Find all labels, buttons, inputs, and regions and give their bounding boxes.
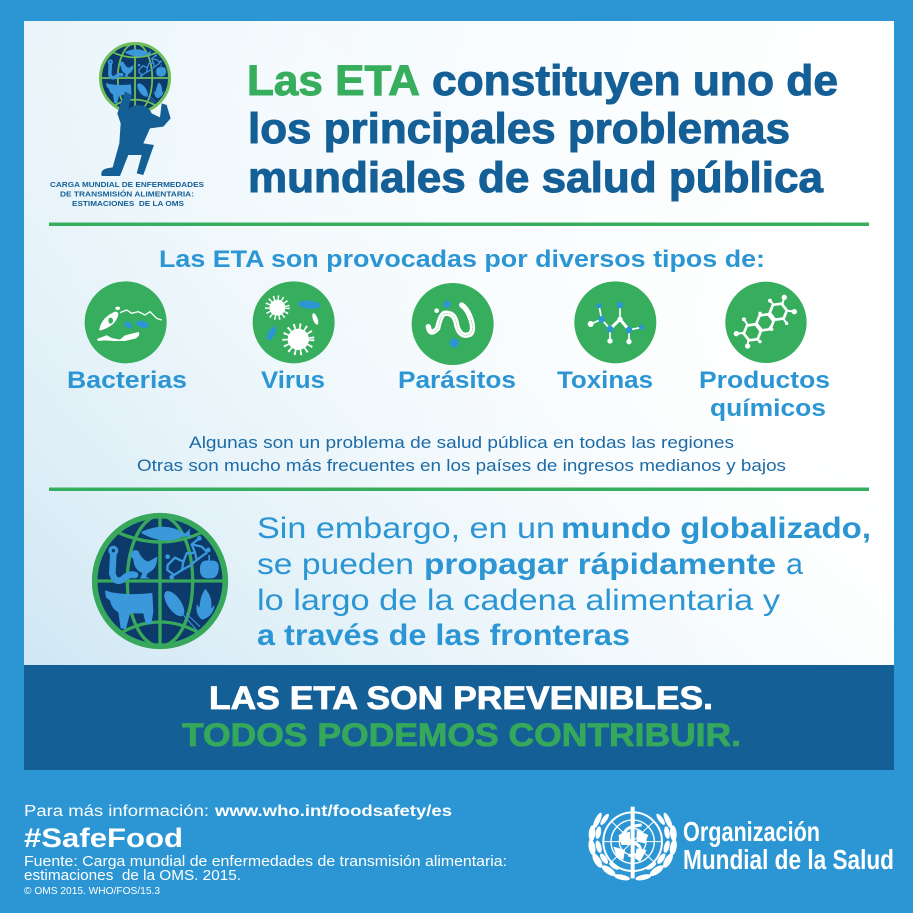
logo caption: CARGA MUNDIAL DE ENFERMEDADES bbox=[50, 180, 204, 189]
text block: globalized world: mundo globalizado, bbox=[561, 512, 871, 545]
logo text: Organizacion Mundial de la Salud: Organización bbox=[683, 816, 820, 847]
icon: productos quimicos bbox=[725, 282, 807, 363]
hashtag: #SafeFood bbox=[24, 823, 183, 853]
label: Productos quimicos: químicos bbox=[710, 395, 826, 422]
text block: globalized world bbox=[257, 512, 871, 652]
text block: globalized world: se pueden bbox=[257, 548, 414, 581]
text block: globalized world: a bbox=[786, 548, 803, 581]
text block: globalized world: lo largo de la cadena alimentaria y bbox=[257, 584, 780, 617]
text block: globalized world: a través de las fronteras bbox=[257, 619, 630, 652]
icon: toxinas bbox=[574, 281, 656, 363]
title: constituyen uno de bbox=[432, 58, 838, 105]
label: Virus: Virus bbox=[261, 367, 325, 394]
icon: virus bbox=[253, 281, 335, 363]
subheading: Las ETA son provocadas por diversos tipos de: bbox=[159, 246, 765, 273]
footer: more information: www.who.int/foodsafety/es bbox=[214, 803, 452, 820]
footer: more information: Para más información: bbox=[24, 803, 209, 820]
source note: © OMS 2015. WHO/FOS/15.3 bbox=[24, 885, 160, 897]
icon: parasitos bbox=[412, 283, 494, 365]
footer: more information bbox=[24, 803, 452, 820]
label: Parasitos: Parásitos bbox=[398, 367, 516, 394]
text block: globalized world: Sin embargo, en un bbox=[257, 512, 555, 545]
title: los principales problemas bbox=[248, 106, 790, 153]
logo caption: ESTIMACIONES DE LA OMS bbox=[72, 199, 184, 208]
text block: regions bbox=[137, 433, 786, 475]
source note: estimaciones de la OMS. 2015. bbox=[24, 868, 241, 884]
title: mundiales de salud pública bbox=[248, 155, 823, 202]
icon: bacterias bbox=[85, 281, 167, 363]
text block: regions: Algunas son un problema de salud pública en todas las regiones bbox=[189, 433, 734, 452]
logo caption: DE TRANSMISIÓN ALIMENTARIA: bbox=[60, 190, 194, 198]
text block: regions: Otras son mucho más frecuentes en los países de ingresos medianos y bajos bbox=[137, 456, 786, 475]
logo caption bbox=[50, 180, 204, 208]
label: Toxinas: Toxinas bbox=[557, 367, 653, 394]
logo: atlas figure carrying the globe bbox=[50, 43, 204, 208]
banner: prevention message: LAS ETA SON PREVENIBLES. bbox=[209, 680, 713, 716]
logo text: Organizacion Mundial de la Salud bbox=[683, 816, 894, 875]
banner: prevention message: TODOS PODEMOS CONTRIBUIR. bbox=[182, 717, 741, 753]
label: Bacterias: Bacterias bbox=[67, 367, 187, 394]
icon: food globe bbox=[95, 516, 225, 646]
text block: globalized world: propagar rápidamente bbox=[424, 548, 776, 581]
logo: WHO emblem bbox=[587, 807, 678, 882]
source note bbox=[24, 854, 507, 897]
title: Las ETA bbox=[247, 58, 420, 105]
panel: main white panel bbox=[24, 21, 894, 665]
label: Productos quimicos bbox=[699, 367, 830, 422]
banner: prevention message bbox=[24, 665, 894, 770]
label: Productos quimicos: Productos bbox=[699, 367, 830, 394]
source note: Fuente: Carga mundial de enfermedades de transmisión alimentaria: bbox=[24, 854, 507, 870]
title bbox=[247, 58, 838, 202]
